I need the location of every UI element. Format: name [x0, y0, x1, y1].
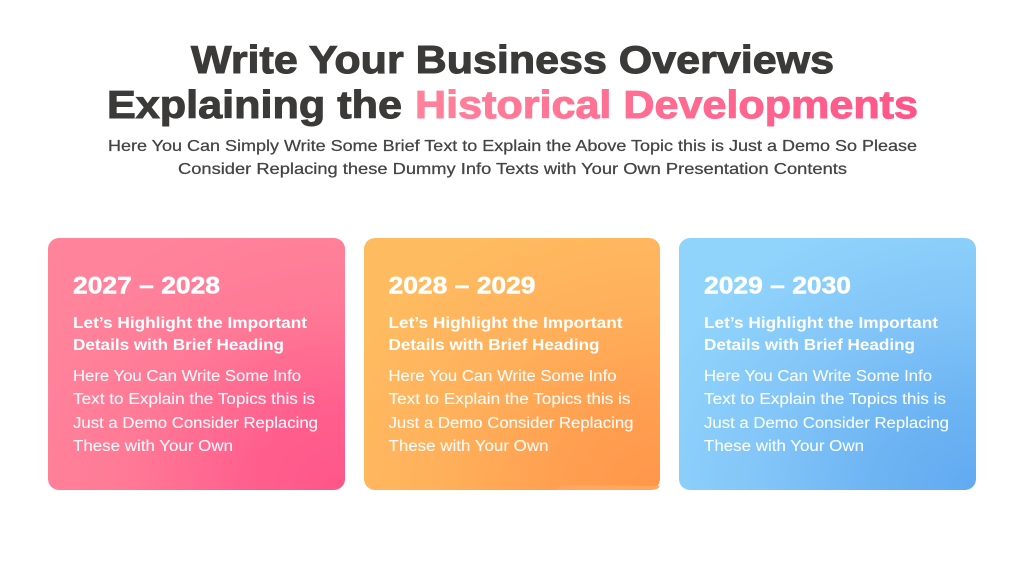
title	[107, 39, 918, 127]
panel: 2028 – 2029: Just a Demo Consider Replacing	[388, 415, 634, 432]
panel: 2029 – 2030: 2029 – 2030	[704, 272, 851, 300]
panel: 2027 – 2028: 2027 – 2028	[73, 272, 220, 300]
panel: 2028 – 2029: These with Your Own	[388, 438, 548, 455]
panel: 2028 – 2029: 2028 – 2029	[388, 272, 536, 300]
panel: 2029 – 2030: Here You Can Write Some Info	[704, 368, 932, 385]
panel: 2028 – 2029	[364, 238, 660, 490]
subtitle text: Consider Replacing these Dummy Info Texts with Your Own Presentation Contents	[178, 161, 847, 178]
panel: 2029 – 2030: These with Your Own	[704, 438, 864, 455]
panel: 2028 – 2029: Let’s Highlight the Important	[388, 315, 622, 332]
panel: 2029 – 2030: Text to Explain the Topics this is	[704, 391, 946, 408]
panel: 2027 – 2028: Text to Explain the Topics this is	[73, 391, 315, 408]
panel: 2027 – 2028: These with Your Own	[73, 438, 233, 455]
panel: 2029 – 2030	[679, 238, 976, 490]
panel: 2027 – 2028: Details with Brief Heading	[73, 337, 284, 354]
panel: 2029 – 2030: Just a Demo Consider Replacing	[704, 415, 949, 432]
title: Write Your Business Overviews	[191, 39, 834, 82]
title: Historical Developments	[415, 84, 918, 127]
panel: 2028 – 2029: Here You Can Write Some Info	[388, 368, 616, 385]
panel: 2027 – 2028: Let’s Highlight the Important	[73, 315, 307, 332]
panel: 2027 – 2028: Here You Can Write Some Info	[73, 368, 301, 385]
panel: 2027 – 2028: Just a Demo Consider Replacing	[73, 415, 318, 432]
panel: 2029 – 2030: Details with Brief Heading	[704, 337, 915, 354]
panel: 2028 – 2029: Text to Explain the Topics this is	[388, 391, 631, 408]
title: Explaining the	[107, 84, 402, 127]
subtitle text: Here You Can Simply Write Some Brief Text to Explain the Above Topic this is Just a Demo So Please	[108, 138, 917, 155]
panel: 2028 – 2029: Details with Brief Heading	[388, 337, 600, 354]
panel: 2029 – 2030: Let’s Highlight the Important	[704, 315, 938, 332]
panel: 2027 – 2028	[48, 238, 345, 490]
subtitle text	[108, 138, 917, 178]
